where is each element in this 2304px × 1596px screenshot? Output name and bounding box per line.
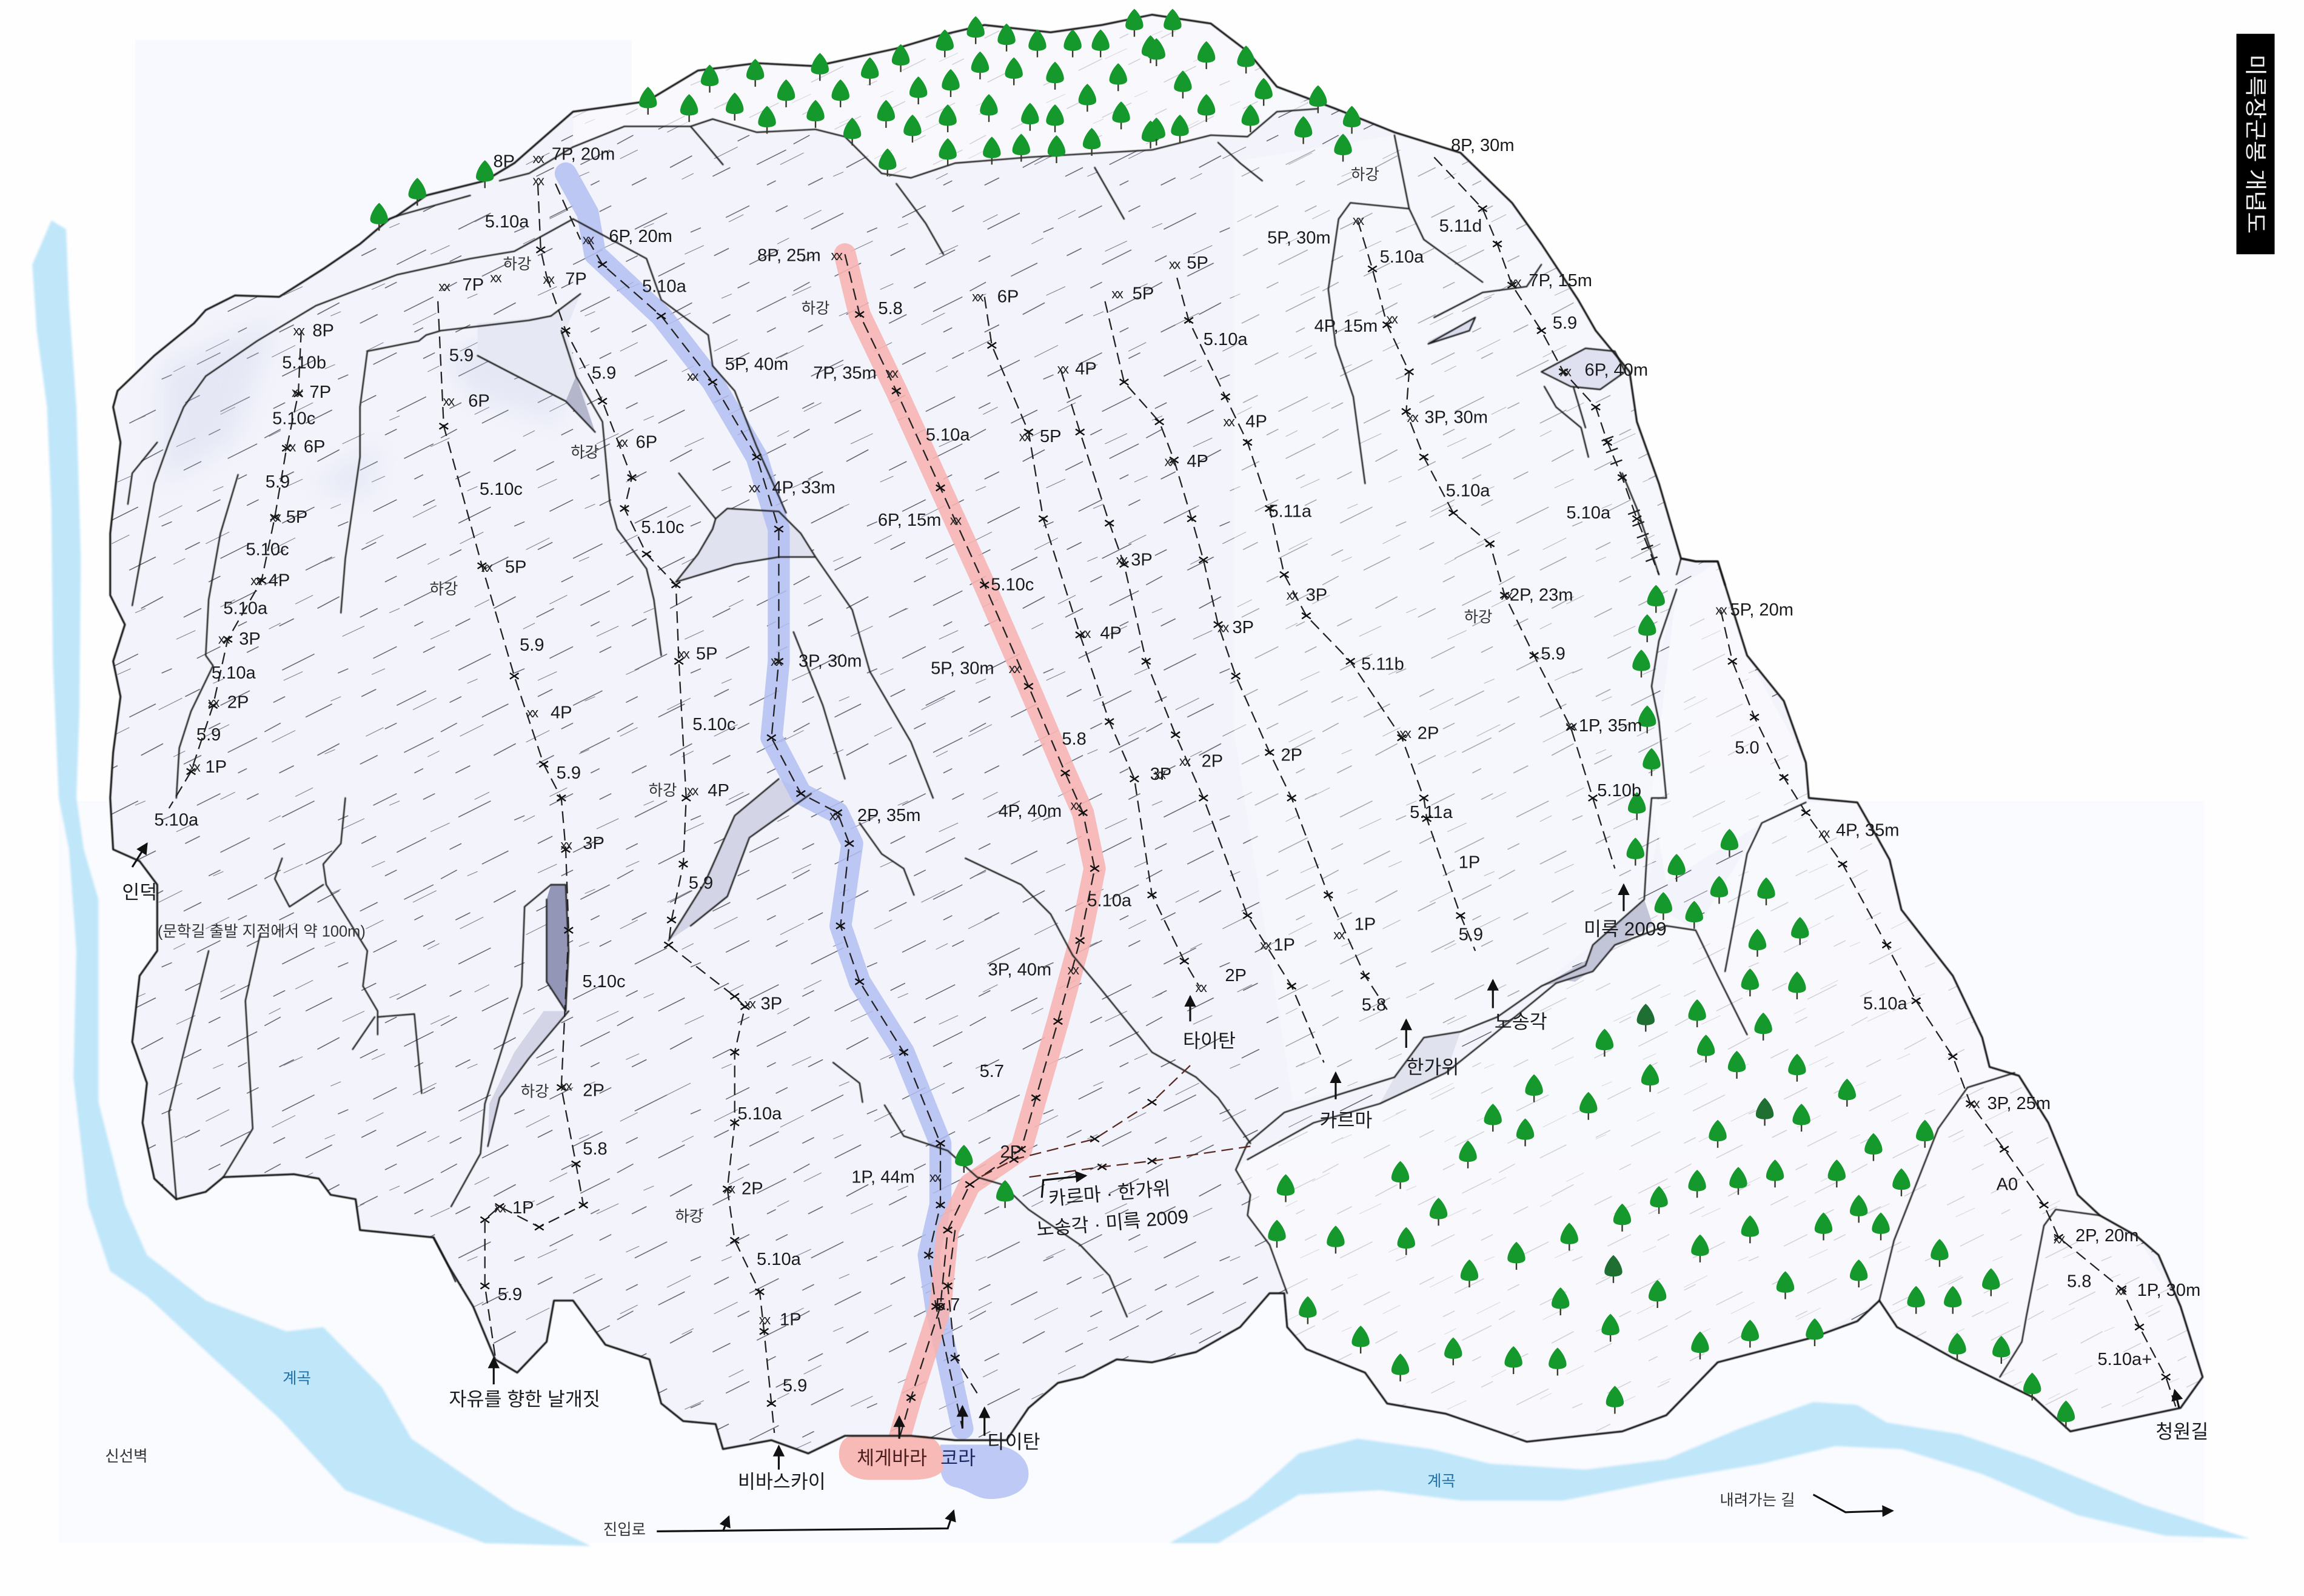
pitch and grade labels: 5P	[1187, 253, 1208, 273]
belay station marks: xx	[1224, 414, 1235, 429]
pitch and grade labels: 하강	[649, 782, 677, 799]
pitch and grade labels: 1P	[1355, 914, 1376, 934]
belay station marks: xx	[929, 1170, 941, 1185]
route name labels: 비바스카이	[738, 1470, 826, 1492]
belay station marks: xx	[749, 480, 760, 495]
pitch and grade labels: 2P	[742, 1179, 763, 1199]
belay station marks: xx	[270, 510, 281, 525]
pitch and grade labels: 5.10a	[757, 1250, 802, 1269]
belay station marks: xx	[1715, 602, 1727, 617]
right stream (계곡)	[1170, 1402, 2249, 1543]
pitch and grade labels: 6P	[304, 437, 325, 457]
belay station marks: xx	[1501, 588, 1513, 603]
red route highlight (체게바라)	[839, 254, 1094, 1480]
entry path arrow (진입로)	[657, 1510, 954, 1531]
pitch and grade labels: 5P, 40m	[725, 355, 788, 374]
place labels: 진입로	[603, 1521, 646, 1538]
pitch and grade labels: 5.11b	[1361, 654, 1404, 674]
pitch and grade labels: 6P	[997, 287, 1019, 307]
belay station marks: xx	[1260, 937, 1272, 953]
pitch and grade labels: 2P	[1225, 966, 1247, 985]
pitch and grade labels: 3P	[239, 629, 261, 649]
pitch and grade labels: 5.10a	[1204, 330, 1248, 349]
pitch and grade labels: 5.9	[1541, 644, 1566, 663]
pitch and grade labels: 5.9	[1459, 925, 1483, 944]
pitch and grade labels: 3P	[1150, 765, 1171, 784]
pitch and grade labels	[154, 136, 2200, 1395]
pitch and grade labels: 5.10a	[1566, 503, 1611, 523]
pitch and grade labels: 8P, 30m	[1451, 136, 1515, 155]
belay station marks: xx	[292, 385, 304, 400]
belay station marks: xx	[250, 573, 263, 588]
belay station marks: xx	[1169, 257, 1180, 272]
belay station marks: xx	[2054, 1232, 2065, 1247]
place labels: 계곡	[283, 1370, 311, 1387]
pitch and grade labels: 5.9	[266, 472, 290, 492]
belay station marks: xx	[293, 323, 305, 338]
pitch and grade labels: 2P, 35m	[857, 806, 920, 825]
belay station marks: xx	[724, 1181, 735, 1196]
pitch and grade labels: 4P	[1075, 359, 1097, 378]
pitch and grade labels: 5.9	[1553, 314, 1577, 333]
pitch and grade labels: 4P, 40m	[999, 802, 1062, 821]
title plate: 미륵장군봉 개념도	[2243, 55, 2268, 233]
left stream (계곡)	[32, 221, 591, 1546]
blue route highlight (코라)	[566, 173, 1028, 1499]
belay station marks: xx	[1057, 361, 1069, 377]
pitch and grade labels: 4P	[551, 703, 572, 722]
pitch and grade labels: A0	[1997, 1175, 2018, 1194]
pitch and grade labels: 하강	[429, 581, 458, 598]
trees	[370, 9, 2075, 1429]
pitch and grade labels: 4P	[269, 571, 290, 590]
pitch and grade labels: 2P	[1418, 723, 1439, 743]
belay station marks: xx	[490, 270, 502, 286]
pitch and grade labels: 5P	[286, 508, 307, 527]
belay station marks: xx	[561, 837, 572, 853]
belay station marks: xx	[950, 512, 962, 528]
pitch and grade labels: 3P	[1306, 586, 1327, 605]
pitch and grade labels: 5.10a	[1863, 994, 1908, 1013]
pitch and grade labels: 5.10a+	[2097, 1350, 2152, 1369]
belay station marks: xx	[744, 996, 756, 1011]
pitch and grade labels: 8P	[493, 152, 515, 172]
pitch and grade labels: 5P, 20m	[1730, 600, 1793, 620]
belay station marks: xx	[1818, 826, 1830, 841]
belay station marks: xx	[533, 173, 544, 189]
pitch and grade labels: 5.10b	[282, 354, 326, 373]
pitch and grade labels: 2P, 20m	[2075, 1226, 2139, 1246]
pitch and grade labels: 5.10c	[480, 480, 523, 499]
pitch and grade labels: 1P	[512, 1198, 534, 1218]
pitch and grade labels: 7P	[310, 383, 331, 402]
belay station marks: xx	[1079, 626, 1091, 641]
pitch and grade labels: 하강	[1351, 166, 1379, 183]
belay station marks: xx	[2115, 1282, 2127, 1298]
belay station marks: xx	[771, 654, 783, 669]
belay station marks: xx	[1154, 767, 1166, 782]
belay station marks: xx	[831, 248, 843, 263]
pitch and grade labels: 3P, 30m	[799, 652, 862, 671]
belay station marks: xx	[1560, 364, 1572, 380]
belay station marks: xx	[1111, 286, 1124, 301]
pitch and grade labels: 7P	[565, 269, 587, 289]
pitch and grade labels: 5P	[505, 557, 526, 577]
pitch and grade labels: 하강	[675, 1209, 703, 1226]
route name labels	[122, 881, 2208, 1492]
pitch and grade labels: 4P	[1100, 624, 1122, 643]
pitch and grade labels: 1P	[205, 757, 227, 777]
pitch and grade labels: 5.8	[878, 299, 903, 318]
belay station marks: xx	[495, 1201, 506, 1216]
route name labels: 인덕	[122, 881, 157, 903]
pitch and grade labels: 5.10c	[582, 972, 626, 991]
belay station marks: xx	[1510, 275, 1522, 290]
belay station marks: xx	[561, 1079, 572, 1094]
belay station marks: xx	[1287, 588, 1298, 603]
belay station marks: xx	[1116, 552, 1128, 568]
pitch and grade labels: 5.10a	[926, 425, 970, 444]
place labels: 내려가는 길	[1720, 1492, 1795, 1509]
pitch and grade labels: 5.8	[1362, 996, 1386, 1015]
pitch and grade labels: 2P	[1281, 746, 1302, 765]
pitch and grade labels: 5.10a	[485, 212, 529, 232]
pitch and grade labels: 6P, 15m	[878, 511, 941, 530]
summit and forest slope lighter ground	[573, 15, 2203, 1442]
pitch and grade labels: 5.10c	[991, 575, 1034, 595]
belay station marks: xx	[1068, 962, 1079, 977]
route name labels: 노송각	[1495, 1010, 1547, 1032]
belay station marks: xx	[1387, 311, 1398, 326]
pitch and grade labels: 5.10c	[246, 540, 289, 559]
belay station marks	[189, 151, 2127, 1327]
pitch and grade labels: 3P, 25m	[1988, 1094, 2051, 1113]
pitch and grade labels: 5.8	[1062, 729, 1087, 749]
pitch and grade labels: 1P	[1459, 853, 1480, 873]
belay station marks: xx	[1165, 454, 1176, 469]
route name labels: 한가위	[1406, 1056, 1459, 1078]
pitch and grade labels: 4P	[1187, 452, 1208, 471]
pitch and grade labels: 5.9	[592, 364, 616, 383]
pitch and grade labels: 5.9	[520, 635, 544, 655]
route name labels: 카르마 · 한가위	[1048, 1177, 1171, 1210]
belay station marks: xx	[527, 705, 538, 720]
belay station marks: xx	[1009, 661, 1020, 676]
belay station marks: xx	[678, 646, 690, 662]
pitch and grade labels: 5.10c	[692, 715, 735, 734]
route name labels: 미륵 2009	[1584, 918, 1667, 940]
belay station marks: xx	[1217, 620, 1229, 635]
pitch and grade labels: 4P	[708, 781, 729, 800]
belay station marks: xx	[1333, 927, 1345, 942]
belay station marks: xx	[687, 783, 698, 798]
pitch and grade labels: 2P, 23m	[1510, 586, 1573, 605]
place labels: 계곡	[1427, 1473, 1456, 1490]
rock cracks and outlines	[128, 109, 2100, 1377]
pitch and grade labels: 5.10a	[223, 598, 268, 618]
pitch and grade labels: 7P	[463, 275, 484, 295]
pitch and grade labels: 2P	[227, 692, 249, 712]
shaded flakes and ledges	[478, 294, 1653, 1146]
pitch and grade labels: 4P, 15m	[1314, 317, 1378, 336]
pitch and grade labels: 하강	[521, 1084, 549, 1101]
approach arrows	[132, 843, 2179, 1470]
route name labels: 청원길	[2155, 1421, 2208, 1443]
pitch and grade labels: 5.10c	[272, 409, 315, 429]
pitch and grade labels: 5.10a	[1380, 247, 1424, 267]
belay station marks: xx	[1179, 754, 1191, 769]
pitch and grade labels: 5.10b	[1597, 781, 1641, 800]
pitch and grade labels: 6P, 20m	[609, 227, 672, 246]
pitch and grade labels: 7P, 35m	[813, 364, 877, 383]
pitch and grade labels: 3P	[583, 834, 604, 853]
pitch and grade labels: 1P, 30m	[2137, 1281, 2200, 1300]
belay station marks: xx	[438, 279, 450, 294]
pitch and grade labels: 5.11d	[1439, 216, 1482, 236]
pitch and grade labels: 5.11a	[1269, 501, 1312, 521]
pitch and grade labels: 5.9	[783, 1376, 807, 1395]
pitch and grade labels: 1P	[1273, 935, 1295, 954]
pitch and grade labels: 2P	[1000, 1142, 1022, 1162]
pitch and grade labels: 하강	[1464, 609, 1492, 626]
pitch and grade labels: 2P	[1202, 751, 1223, 771]
belay station marks: xx	[687, 369, 698, 384]
pitch and grade labels: 5P	[696, 644, 717, 663]
pitch and grade labels: 4P, 33m	[772, 478, 836, 498]
pitch and grade labels: 하강	[802, 300, 829, 317]
pitch and grade labels: 3P	[1131, 550, 1153, 569]
belay station marks: xx	[887, 366, 899, 381]
route name labels: 자유를 향한 날개짓	[449, 1388, 600, 1410]
descent path arrow (내려가는 길)	[1813, 1495, 1892, 1512]
pitch and grade labels: 3P	[1232, 618, 1254, 637]
pitch and grade labels: 5.9	[196, 725, 221, 745]
start point note: (문학길 출발 지점에서 약 100m)	[158, 924, 366, 941]
pitch and grade labels: 6P	[636, 432, 657, 452]
pitch and grade labels: 5.7	[936, 1295, 960, 1315]
pitch and grade labels: 8P	[312, 321, 334, 340]
pitch and grade labels: 5.8	[583, 1139, 608, 1159]
pitch and grade labels: 7P, 20m	[552, 144, 615, 164]
belay station marks: xx	[481, 560, 493, 575]
pitch and grade labels: 하강	[571, 444, 599, 461]
pitch and grade labels: 5.9	[498, 1285, 522, 1304]
route name labels: 타이탄	[988, 1431, 1040, 1453]
pitch and grade labels: 5.10a	[1446, 481, 1490, 500]
route name labels: 코라	[940, 1447, 976, 1469]
pitch and grade labels: 5P	[1133, 284, 1154, 304]
pitch and grade labels: 5.10a	[154, 810, 199, 830]
belay station marks: xx	[284, 439, 296, 454]
pitch and grade labels: 3P	[761, 994, 782, 1013]
pitch and grade labels: 하강	[503, 256, 531, 273]
pitch and grade labels: 5P, 30m	[1267, 229, 1331, 248]
pitch and grade labels: 6P, 40m	[1585, 361, 1648, 380]
pitch and grade labels: 3P, 40m	[988, 961, 1051, 980]
belay station marks: xx	[1353, 213, 1364, 228]
climbing route lines (dashed with bolts)	[169, 157, 2176, 1439]
belay station marks: xx	[759, 1312, 771, 1327]
route name labels: 체게바라	[857, 1447, 927, 1469]
pitch and grade labels: 5.9	[557, 763, 581, 783]
pitch and grade labels: 5.7	[980, 1062, 1004, 1081]
pitch and grade labels: 5.9	[449, 346, 474, 366]
route name labels: 노송각 · 미륵 2009	[1036, 1205, 1190, 1240]
pitch and grade labels: 5.0	[1735, 739, 1760, 758]
belay station marks: xx	[829, 808, 842, 823]
pitch and grade labels: 1P	[780, 1310, 802, 1329]
belay station marks: xx	[1399, 726, 1412, 741]
belay station marks: xx	[543, 272, 555, 287]
place labels	[105, 1370, 1795, 1538]
belay station marks: xx	[208, 695, 219, 710]
pitch and grade labels: 6P	[468, 392, 490, 411]
pitch and grade labels: 5.10a	[1087, 891, 1132, 911]
place labels: 신선벽	[105, 1448, 148, 1465]
belay station marks: xx	[1968, 1096, 1980, 1112]
title plate	[2237, 34, 2275, 254]
belay station marks: xx	[1195, 980, 1207, 995]
belay station marks: xx	[972, 289, 984, 304]
pitch and grade labels: 4P	[1245, 412, 1267, 432]
pitch and grade labels: 5.8	[2067, 1272, 2091, 1291]
pitch and grade labels: 8P, 25m	[757, 246, 821, 266]
pitch and grade labels: 5.10a	[642, 277, 687, 297]
pitch and grade labels: 5.10a	[212, 663, 256, 683]
pitch and grade labels: 5P, 30m	[931, 659, 994, 679]
pitch and grade labels: 1P, 44m	[851, 1167, 915, 1187]
belay station marks: xx	[583, 232, 594, 247]
soft lavender shading on rock	[162, 316, 566, 500]
belay station marks: xx	[1071, 798, 1082, 813]
belay station marks: xx	[218, 632, 230, 647]
belay station marks: xx	[1019, 429, 1031, 444]
belay station marks: xx	[1566, 719, 1578, 734]
belay station marks: xx	[533, 151, 544, 166]
belay station marks: xx	[443, 394, 455, 409]
pitch and grade labels: 5.9	[689, 874, 713, 893]
pitch and grade labels: 3P, 30m	[1424, 407, 1488, 427]
pitch and grade labels: 5.11a	[1410, 803, 1453, 822]
pitch and grade labels: 1P, 35m	[1579, 716, 1642, 736]
pitch and grade labels: 4P, 35m	[1836, 820, 1900, 840]
pitch and grade labels: 7P, 15m	[1529, 271, 1592, 290]
pitch and grade labels: 5.10c	[641, 518, 685, 537]
route name labels: 타이탄	[1183, 1030, 1236, 1051]
belay station marks: xx	[617, 435, 628, 450]
pitch and grade labels: 5.10a	[738, 1104, 782, 1124]
pitch and grade labels: 5P	[1040, 427, 1062, 446]
belay station marks: xx	[189, 760, 201, 775]
pitch and grade labels: 2P	[583, 1081, 604, 1100]
route name labels: 카르마	[1319, 1109, 1372, 1131]
belay station marks: xx	[1407, 410, 1419, 425]
